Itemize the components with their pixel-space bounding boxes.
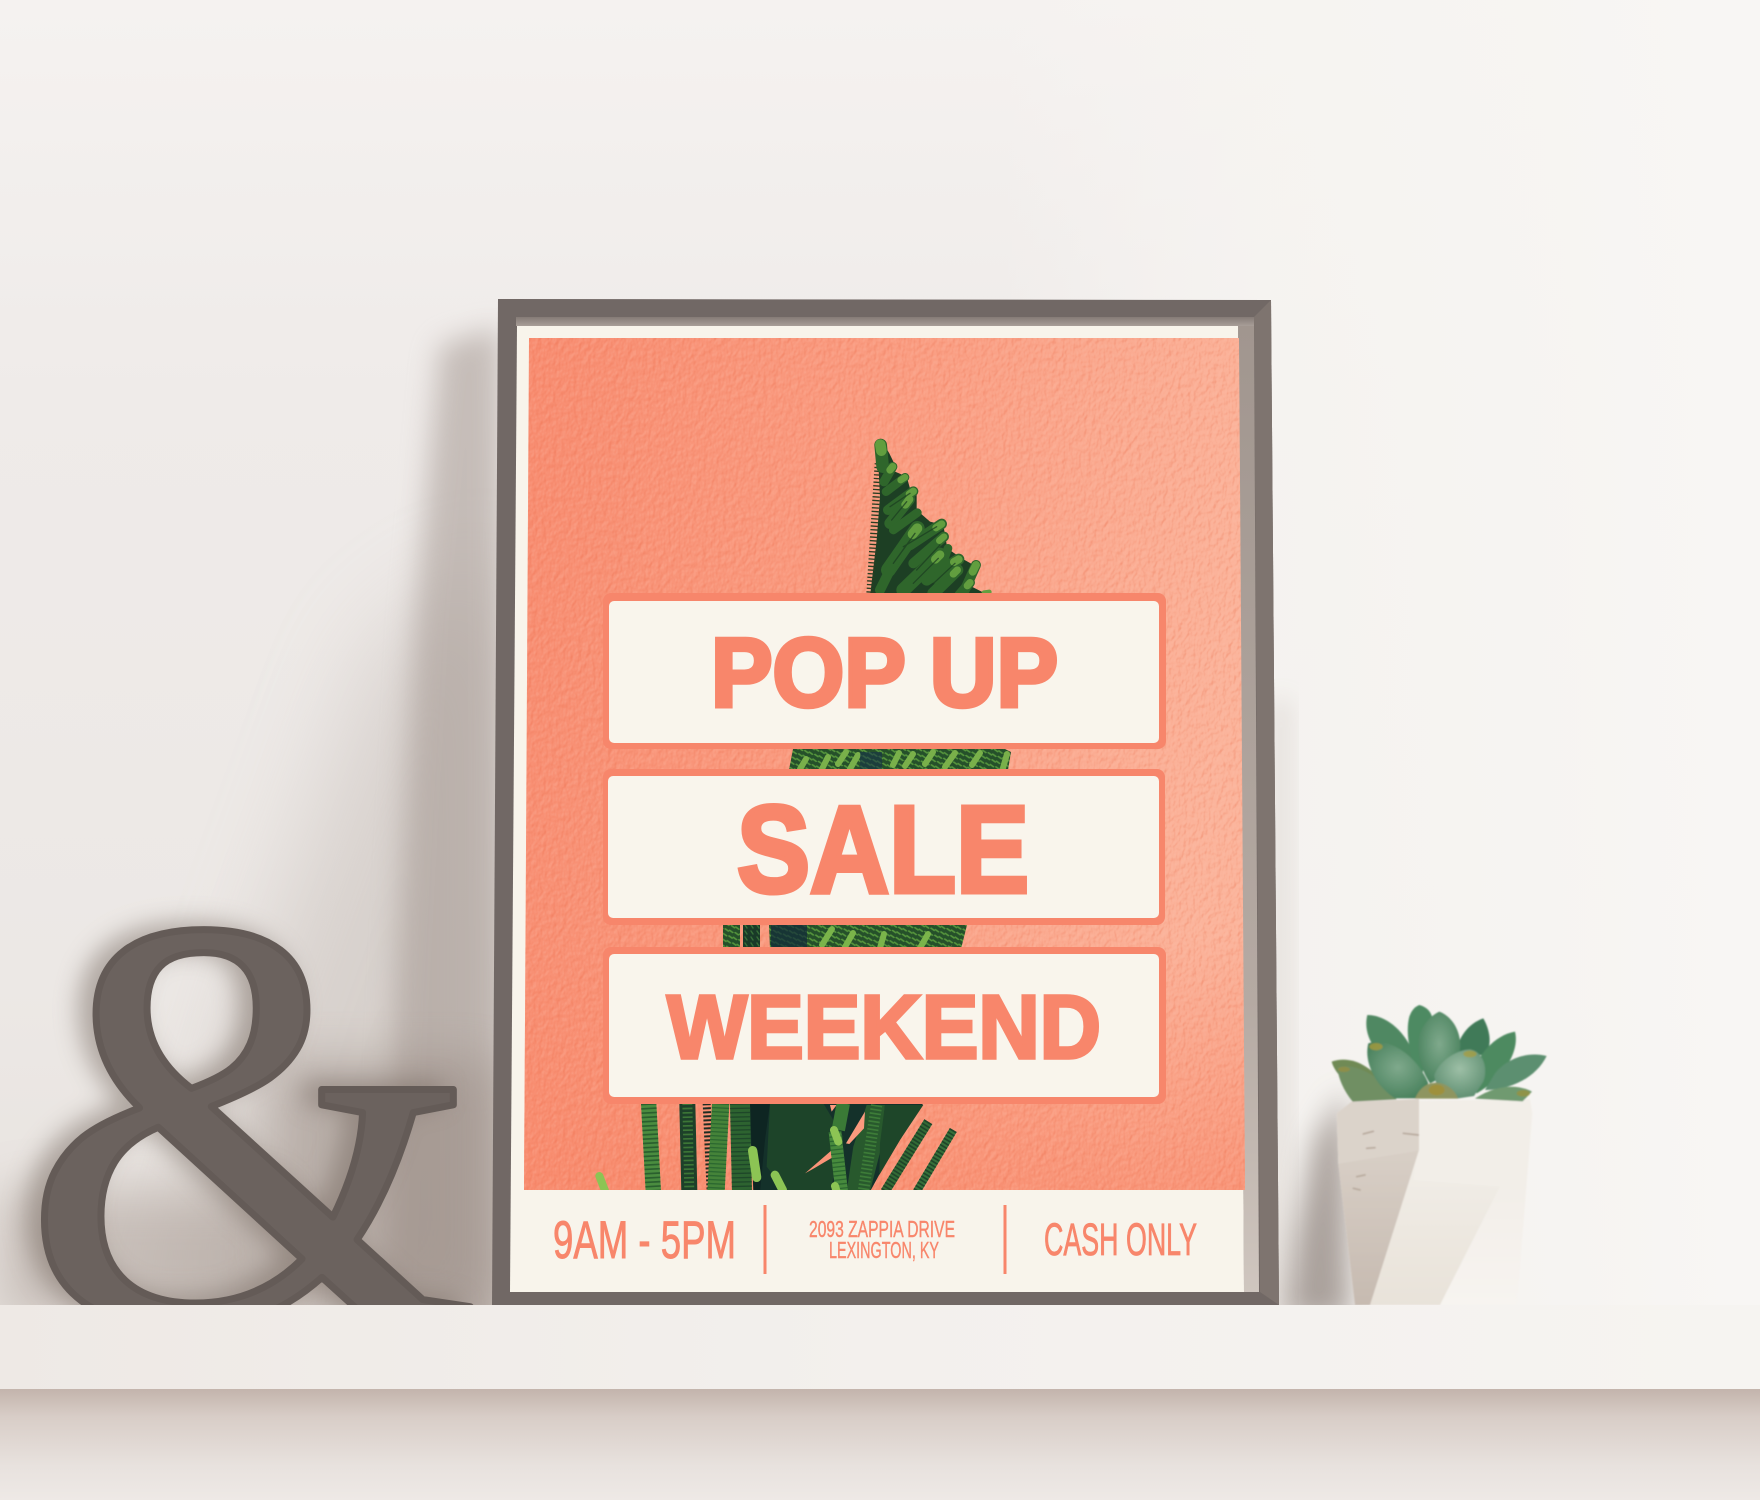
plant middle band [789,749,1011,770]
pot [1337,1099,1532,1305]
ampersand object [15,908,474,1305]
banner: WEEKEND: WEEKEND [667,978,1101,1078]
plant lower band [723,925,967,949]
potted succulent [1332,1005,1547,1305]
shelf underside shadow [0,1389,1760,1500]
hours text: 9AM - 5PM [553,1211,736,1270]
framed poster [492,299,1279,1305]
banner: SALE: SALE [737,782,1029,919]
plant bottom stems [599,1103,953,1192]
address text: LEXINGTON, KY [829,1237,939,1263]
ampersand letterform: & [22,796,481,1450]
needle strands [649,1103,653,1192]
dark mass [750,1103,923,1192]
paper [510,326,1244,1292]
orange gaps [805,1151,832,1174]
banner: WEEKEND [603,947,1166,1104]
bright tips [599,1130,838,1192]
banner: SALE [603,769,1165,925]
shelf [0,1305,1760,1500]
frame inner right strip [1238,326,1259,1292]
footer strip details [553,1205,1197,1274]
divider right [1004,1205,1006,1274]
shadows cast on wall [0,327,1350,1340]
frame right side lighter [1254,300,1279,1305]
banner: POP UP: POP UP [711,618,1058,727]
payment text: CASH ONLY [1044,1214,1197,1265]
frame outer [492,299,1279,1305]
frame inner top bevel [516,317,1254,326]
ampersand shadow: & [8,792,467,1446]
address text: 2093 ZAPPIA DRIVE [809,1216,955,1242]
shelf front [0,1305,1760,1389]
address text [809,1216,955,1263]
poster photo background [524,338,1246,1190]
plant on poster [599,443,1011,1192]
plant top [870,443,993,597]
banner: POP UP [603,593,1166,749]
divider left [764,1205,766,1274]
succulent leaves [1332,1005,1547,1102]
